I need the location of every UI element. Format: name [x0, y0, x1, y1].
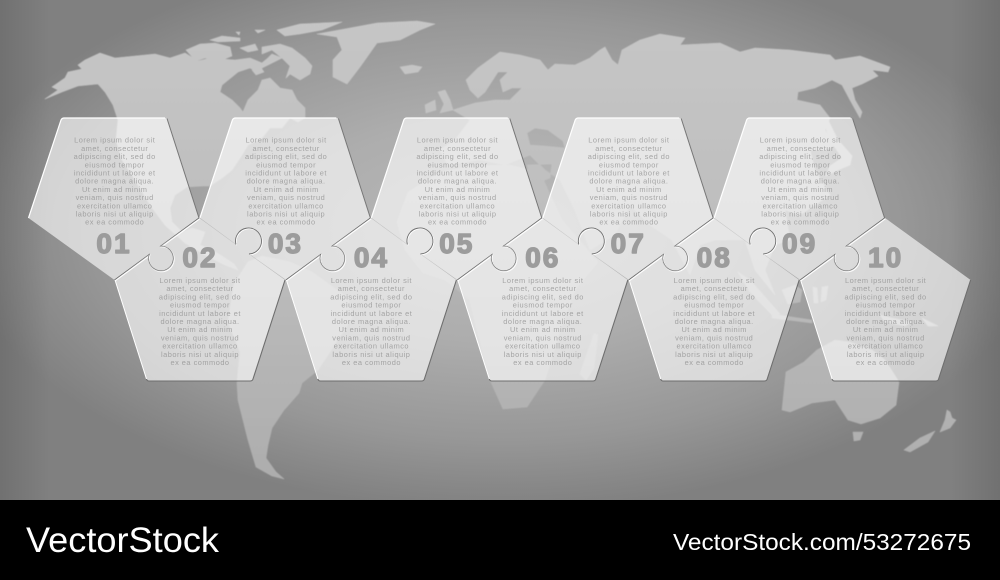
piece 09 shape [714, 118, 885, 280]
body text 05: dolore magna aliqua. [418, 177, 497, 186]
panel: step 03 [200, 118, 371, 281]
body text 07: Lorem ipsum dolor sit [588, 136, 669, 145]
piece 06 shape [458, 218, 628, 381]
map: arctic islands [186, 22, 342, 80]
footer image id: VectorStock.com/53272675 [673, 529, 971, 555]
body text 03: dolore magna aliqua. [247, 177, 326, 186]
body text 04: dolore magna aliqua. [332, 317, 411, 326]
panel: step 08 [629, 218, 799, 381]
body text 10: adipiscing elit, sed do [845, 292, 927, 301]
map: iceland [400, 65, 422, 74]
number 04: 04 [354, 242, 389, 273]
body text 03: laboris nisi ut aliquip [247, 210, 325, 218]
number 03: 03 [268, 228, 303, 259]
body text 08: Ut enim ad minim [681, 325, 747, 334]
panel: step 09 [714, 118, 885, 281]
body text 01: amet, consectetur [81, 144, 148, 153]
footer logo text: VectorStock [26, 521, 220, 560]
body text 03: Lorem ipsum dolor sit [246, 136, 327, 145]
body text 03: veniam, quis nostrud [247, 193, 325, 202]
body text 03: exercitation ullamco [248, 201, 324, 210]
body text 08: dolore magna aliqua. [675, 317, 754, 326]
number 01: 01 [96, 228, 132, 259]
body text 02: adipiscing elit, sed do [159, 292, 241, 301]
body text 03: incididunt ut labore et [245, 168, 327, 178]
body text 04: adipiscing elit, sed do [330, 292, 412, 301]
body text 06: exercitation ullamco [505, 342, 580, 351]
body text 06: veniam, quis nostrud [504, 333, 582, 342]
body text 09: adipiscing elit, sed do [759, 152, 841, 161]
piece 10 shape [801, 218, 971, 381]
body text 02: Ut enim ad minim [167, 325, 233, 334]
body text 07: amet, consectetur [595, 144, 663, 153]
world map [45, 21, 956, 479]
body text 04: Lorem ipsum dolor sit [331, 276, 412, 285]
body text 07: Ut enim ad minim [596, 185, 662, 194]
body text 10: Lorem ipsum dolor sit [845, 276, 926, 285]
body text 01: eiusmod tempor [85, 160, 145, 169]
body text 01: Ut enim ad minim [82, 185, 147, 194]
body text 05: Lorem ipsum dolor sit [417, 136, 498, 145]
body text 03: ex ea commodo [257, 218, 316, 227]
body text 07: eiusmod tempor [599, 160, 659, 169]
number 02: 02 [182, 242, 218, 273]
body text 09: laboris nisi ut aliquip [761, 210, 839, 218]
body text 06: incididunt ut labore et [502, 309, 584, 318]
map: eurasia [440, 34, 890, 295]
body text 04: amet, consectetur [338, 284, 405, 293]
body text 03: Ut enim ad minim [253, 185, 319, 194]
body text 10: veniam, quis nostrud [846, 333, 925, 342]
number 06: 06 [525, 242, 560, 273]
body text 05: ex ea commodo [428, 218, 487, 227]
body text 06: amet, consectetur [509, 284, 576, 293]
body text 10: ex ea commodo [856, 358, 915, 367]
body text 05: laboris nisi ut aliquip [418, 210, 497, 218]
body text 04: Ut enim ad minim [339, 325, 404, 334]
body text 03: amet, consectetur [252, 144, 320, 153]
body text 02: dolore magna aliqua. [160, 317, 240, 326]
body text 08: ex ea commodo [685, 358, 744, 367]
piece 01 shape [28, 118, 199, 280]
body text 08: incididunt ut labore et [673, 309, 755, 318]
body text 10: incididunt ut labore et [845, 309, 926, 318]
body text 07: laboris nisi ut aliquip [590, 210, 668, 218]
body text 02: exercitation ullamco [162, 342, 238, 351]
number 10: 10 [868, 242, 903, 273]
body text 09: Ut enim ad minim [768, 185, 833, 194]
body text 08: veniam, quis nostrud [675, 333, 753, 342]
body text 08: Lorem ipsum dolor sit [674, 276, 755, 285]
panel: step 07 [543, 118, 714, 281]
map: greenland [317, 21, 435, 84]
body text 01: adipiscing elit, sed do [74, 152, 156, 161]
body text 01: dolore magna aliqua. [75, 177, 154, 186]
body text 02: veniam, quis nostrud [161, 333, 239, 342]
body text 08: eiusmod tempor [684, 301, 744, 310]
body text 08: adipiscing elit, sed do [673, 292, 755, 301]
body text 02: incididunt ut labore et [159, 309, 241, 318]
body text 03: eiusmod tempor [256, 160, 316, 169]
body text 06: Ut enim ad minim [510, 325, 576, 334]
map: british isles [425, 90, 453, 113]
number 08: 08 [697, 242, 732, 273]
panel: step 04 [286, 218, 456, 381]
body text 07: adipiscing elit, sed do [588, 152, 670, 161]
body text 01: ex ea commodo [85, 218, 144, 227]
body text 09: veniam, quis nostrud [761, 193, 839, 202]
body text 04: eiusmod tempor [341, 301, 401, 310]
map: australia [782, 340, 899, 424]
body text 06: Lorem ipsum dolor sit [502, 276, 583, 285]
piece 07 shape [543, 118, 713, 280]
piece 04 shape [286, 218, 456, 381]
body text 07: dolore magna aliqua. [589, 177, 668, 186]
body text 02: laboris nisi ut aliquip [161, 350, 239, 359]
number 05: 05 [439, 228, 474, 259]
body text 01: laboris nisi ut aliquip [76, 210, 154, 218]
piece 03 shape [200, 118, 370, 280]
body text 08: exercitation ullamco [677, 342, 752, 351]
panel: step 05 [371, 118, 542, 281]
body text 09: amet, consectetur [767, 144, 834, 153]
body text 08: laboris nisi ut aliquip [675, 350, 753, 359]
body text 09: eiusmod tempor [770, 160, 830, 169]
map: south america [228, 256, 352, 479]
map: japan and east asia islands [813, 112, 852, 303]
body text 05: adipiscing elit, sed do [416, 152, 499, 161]
body text 10: amet, consectetur [852, 284, 919, 293]
body text 01: exercitation ullamco [77, 201, 152, 210]
map: new zealand [904, 410, 956, 452]
body text 05: eiusmod tempor [427, 160, 488, 169]
body text 06: ex ea commodo [513, 358, 572, 367]
map: africa [397, 165, 598, 409]
piece 05 shape [371, 118, 542, 280]
body text 05: amet, consectetur [424, 144, 491, 153]
body text 06: eiusmod tempor [513, 301, 573, 310]
body text 09: ex ea commodo [771, 218, 830, 227]
piece 08 shape [629, 218, 799, 381]
body text 05: Ut enim ad minim [425, 185, 490, 194]
body text 04: ex ea commodo [342, 358, 401, 367]
body text 07: veniam, quis nostrud [590, 193, 668, 202]
panel: step 10 [801, 218, 971, 381]
body text 09: incididunt ut labore et [759, 168, 841, 178]
footer bar [0, 500, 1000, 580]
body text 01: Lorem ipsum dolor sit [74, 136, 155, 145]
number 07: 07 [611, 228, 646, 259]
map: madagascar [580, 333, 598, 380]
body text 03: adipiscing elit, sed do [245, 152, 327, 161]
body text 02: ex ea commodo [170, 358, 230, 367]
body text 07: exercitation ullamco [591, 201, 667, 210]
body text 05: exercitation ullamco [420, 201, 495, 210]
body text 07: incididunt ut labore et [588, 168, 670, 178]
body text 02: amet, consectetur [166, 284, 234, 293]
map: indonesia and pacific islands [738, 272, 938, 326]
body text 05: incididunt ut labore et [417, 168, 498, 178]
body text 09: exercitation ullamco [763, 201, 838, 210]
body text 06: laboris nisi ut aliquip [504, 350, 582, 359]
body text 01: incididunt ut labore et [74, 168, 156, 178]
body text 02: eiusmod tempor [170, 301, 230, 310]
body text 10: laboris nisi ut aliquip [847, 350, 925, 359]
panel: step 02 [115, 218, 285, 381]
body text 02: Lorem ipsum dolor sit [159, 276, 241, 285]
body text 09: Lorem ipsum dolor sit [760, 136, 841, 145]
body text 09: dolore magna aliqua. [761, 177, 840, 186]
body text 04: exercitation ullamco [334, 342, 409, 351]
number 09: 09 [782, 228, 817, 259]
panel: step 01 [28, 118, 200, 281]
body text 04: laboris nisi ut aliquip [332, 350, 410, 359]
panel: step 06 [458, 218, 628, 381]
body text 08: amet, consectetur [681, 284, 748, 293]
body text 04: veniam, quis nostrud [332, 333, 411, 342]
map: north america [45, 53, 305, 270]
body text 06: dolore magna aliqua. [503, 317, 582, 326]
body text 05: veniam, quis nostrud [418, 193, 497, 202]
body text 10: exercitation ullamco [848, 342, 923, 351]
body text 10: Ut enim ad minim [853, 325, 918, 334]
body text 07: ex ea commodo [599, 218, 658, 227]
body text 04: incididunt ut labore et [331, 309, 412, 318]
body text 06: adipiscing elit, sed do [502, 292, 584, 301]
body text 01: veniam, quis nostrud [76, 193, 154, 202]
map: tasmania [853, 432, 863, 441]
piece 02 shape [115, 218, 285, 381]
body text 10: eiusmod tempor [856, 301, 916, 310]
body text 10: dolore magna aliqua. [846, 317, 925, 326]
